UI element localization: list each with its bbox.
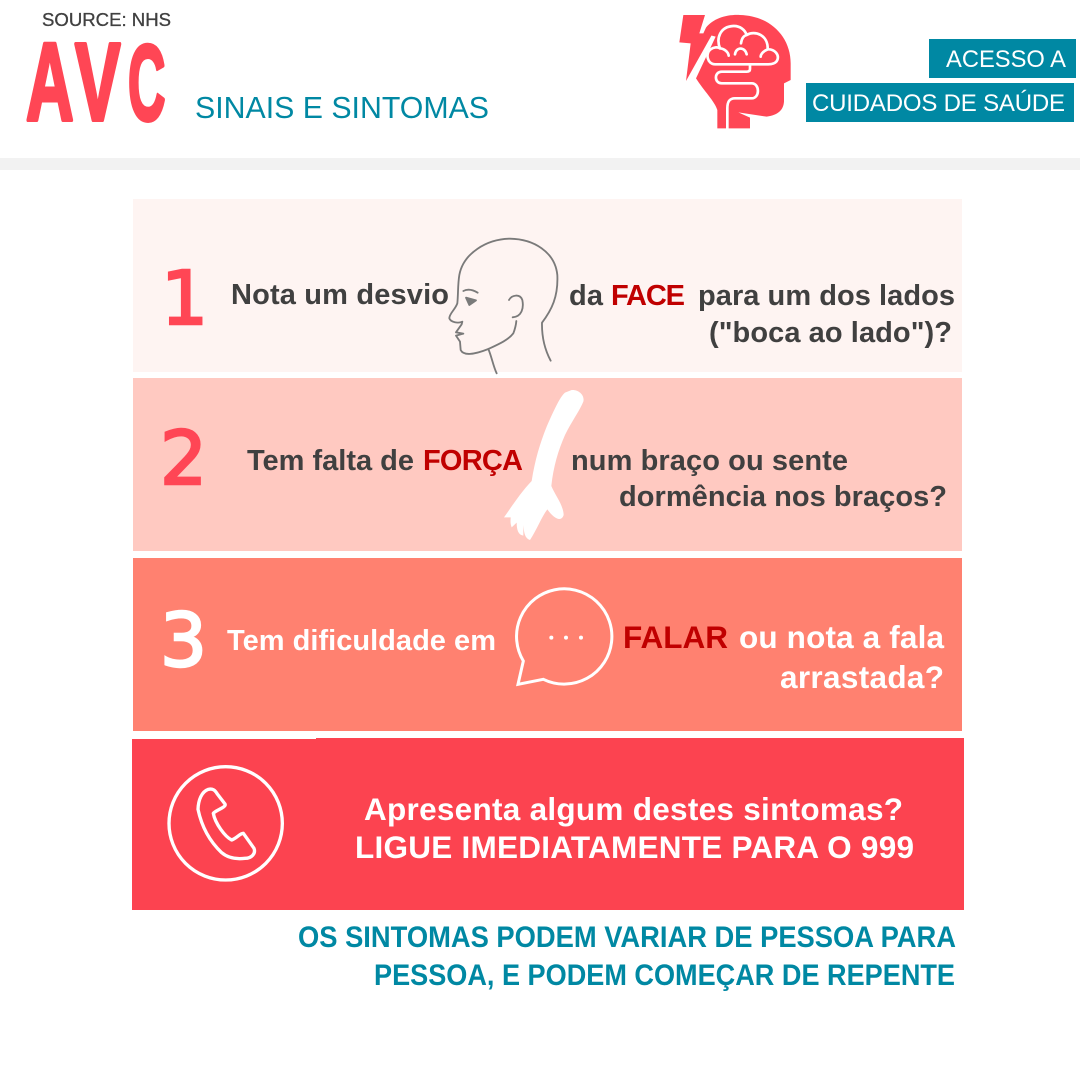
text: arm question: Tem falta de [247, 445, 414, 477]
number 3: 3 [160, 598, 207, 684]
icon: phone [169, 767, 282, 880]
source label: SOURCE: NHS [42, 10, 171, 30]
text: call instruction: LIGUE IMEDIATAMENTE PARA O 999 [355, 829, 914, 865]
text: speech question: arrastada? [780, 659, 944, 695]
text: call instruction: Apresenta algum destes sintomas? [364, 791, 903, 827]
text: speech question: FALAR [623, 619, 728, 655]
badge: acesso a [929, 39, 1076, 78]
footer note: OS SINTOMAS PODEM VARIAR DE PESSOA PARA [298, 921, 956, 954]
text: face question [231, 279, 955, 349]
subtitle: SINAIS E SINTOMAS [195, 90, 489, 125]
icon: arm [504, 390, 584, 540]
number 2: 2 [160, 416, 207, 502]
text: speech question: Tem dificuldade em [227, 625, 496, 657]
text: arm question: dormência nos braços? [619, 481, 947, 513]
panel 3: speech [133, 558, 962, 731]
text: arm question [247, 445, 947, 513]
badge: acesso a: ACESSO A [946, 46, 1066, 73]
text: face question: Nota um desvio [231, 279, 449, 311]
text: face question: da [569, 280, 604, 312]
icon: head profile [449, 239, 557, 373]
text: call instruction [355, 791, 914, 865]
panel 1: face [133, 199, 962, 373]
title: AVC: C [128, 22, 165, 143]
text: speech question [227, 619, 944, 695]
text: arm question: num braço ou sente [571, 445, 848, 477]
text: speech question: ou nota a fala [739, 619, 944, 655]
header [26, 10, 1076, 144]
panel 4: call to action [132, 738, 964, 910]
title: AVC [26, 21, 165, 144]
text: face question: ("boca ao lado")? [709, 317, 952, 349]
title: AVC: V [75, 21, 120, 144]
number 1: 1 [161, 256, 208, 342]
badge: cuidados de saúde [806, 83, 1074, 122]
badge: cuidados de saúde: CUIDADOS DE SAÚDE [812, 90, 1065, 117]
footer note: PESSOA, E PODEM COMEÇAR DE REPENTE [374, 959, 955, 992]
text: face question: para um dos lados [698, 280, 955, 312]
icon: head with brain and lightning [679, 15, 791, 128]
text: arm question: FORÇA [423, 445, 523, 477]
panel 2: arm [133, 378, 962, 551]
text: face question: FACE [611, 280, 685, 312]
icon: speech bubble [517, 589, 612, 684]
footer note [298, 921, 956, 992]
title: AVC: A [26, 22, 74, 144]
